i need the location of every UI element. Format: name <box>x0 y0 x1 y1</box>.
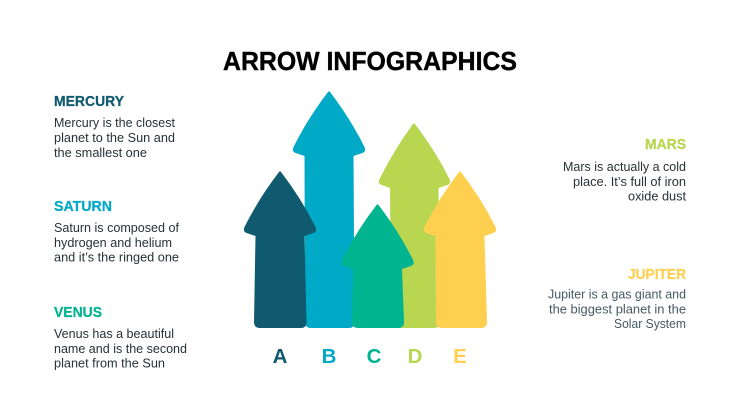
text: venus description: planet from the Sun <box>54 356 165 370</box>
arrow chart <box>244 91 496 328</box>
panel: venus <box>54 304 187 370</box>
heading: mars: MARS <box>645 136 686 153</box>
heading: jupiter: JUPITER <box>628 266 686 283</box>
text: saturn description: and it’s the ringed one <box>54 250 179 264</box>
arrow: C <box>341 204 414 328</box>
label: D: D <box>408 345 422 368</box>
panel: mercury <box>54 93 176 160</box>
label: C: C <box>367 345 382 368</box>
text: mars description: place. It’s full of iron <box>573 175 686 189</box>
axis labels <box>273 345 467 368</box>
label: A: A <box>273 345 288 368</box>
text: saturn description: hydrogen and helium <box>54 236 172 250</box>
panel: jupiter <box>548 266 686 331</box>
label: B: B <box>322 345 336 368</box>
text: jupiter description: Jupiter is a gas giant and <box>548 288 686 302</box>
arrow: B <box>293 91 365 328</box>
heading: venus: VENUS <box>54 304 102 321</box>
text: mars description: oxide dust <box>628 190 687 204</box>
text: mars description: Mars is actually a cold <box>563 160 686 174</box>
arrow: E <box>424 171 496 328</box>
panel: saturn <box>54 198 180 264</box>
text: mars description <box>563 160 687 204</box>
title: ARROW INFOGRAPHICS <box>223 46 517 76</box>
text: saturn description: Saturn is composed of <box>54 221 180 235</box>
panel: mars <box>563 136 687 204</box>
arrow: D <box>379 123 450 328</box>
text: mercury description: the smallest one <box>54 146 147 160</box>
text: saturn description <box>54 221 180 264</box>
text: mercury description <box>54 116 176 160</box>
text: jupiter description <box>548 288 686 331</box>
text: venus description: name and is the second <box>54 342 187 356</box>
text: jupiter description: Solar System <box>614 317 686 331</box>
text: venus description: Venus has a beautiful <box>54 327 174 341</box>
heading: saturn: SATURN <box>54 198 112 215</box>
text: venus description <box>54 327 187 370</box>
label: E: E <box>453 345 467 368</box>
text: mercury description: Mercury is the closest <box>54 116 176 130</box>
text: jupiter description: the biggest planet in the <box>549 302 686 316</box>
heading: mercury: MERCURY <box>54 93 124 110</box>
text: mercury description: planet to the Sun and <box>54 131 175 145</box>
arrow: A <box>244 171 316 328</box>
